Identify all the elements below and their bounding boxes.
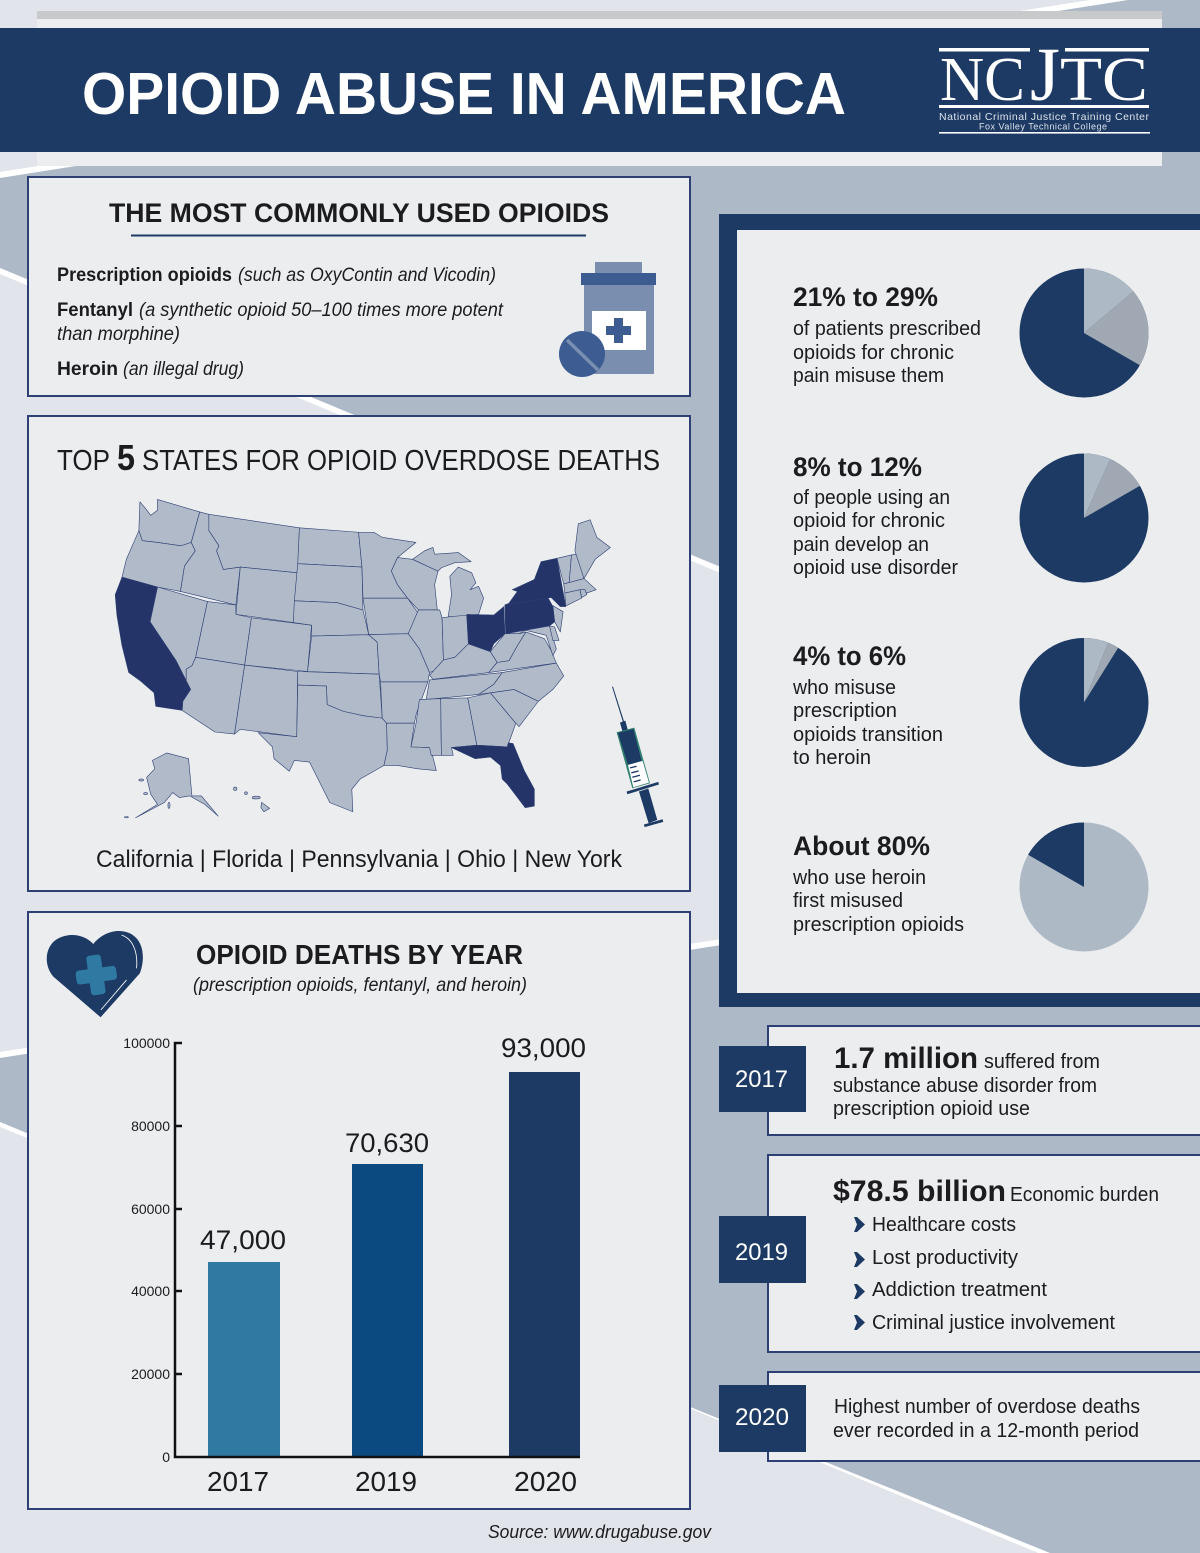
text: fentanyl [57,300,504,345]
heading: opioid deaths by year: OPIOID DEATHS BY YEAR [196,939,523,970]
state: Hawaii [234,787,270,812]
y axis labels [123,1035,170,1465]
text: 1.7 million: prescription opioid use [833,1098,1030,1120]
pie chart: 21% to 29% [1020,268,1149,398]
stat: about 80% [792,831,964,936]
text: highest overdose deaths: ever recorded in a 12-month period [833,1420,1139,1442]
stat: about 80%: About 80% [793,831,930,861]
heading: top 5 states: STATES FOR OPIOID OVERDOSE DEATHS [142,445,660,477]
list: cost items: Addiction treatment [872,1279,1047,1301]
stat: 4% to 6%: to heroin [793,747,871,769]
heading: top 5 states: 5 [117,437,135,478]
stat: about 80%: first misused [793,890,903,912]
text: 1.7 million: suffered from [984,1051,1100,1073]
pie chart: 4% to 6% [1020,638,1148,767]
value labels: 93,000 [501,1033,586,1063]
stat: 8% to 12% [793,452,958,579]
axes [175,1043,580,1457]
y axis labels: 20000 [131,1366,170,1382]
text: heroin: (an illegal drug) [123,359,244,380]
stat: 4% to 6%: opioids transition [793,724,943,746]
text: heroin: Heroin [57,359,118,380]
highlighted: New York [505,558,566,607]
stat: 21% to 29%: of patients prescribed [793,318,981,340]
highlighted: Ohio [467,607,505,652]
value labels: 70,630 [345,1128,429,1158]
pie chart: 8% to 12% [1020,454,1148,582]
stat: 8% to 12%: pain develop an [793,534,929,556]
stat: about 80%: prescription opioids [793,914,964,936]
highlighted: Pennsylvania [505,597,555,634]
y axis labels: 0 [162,1449,170,1465]
text: 1.7 million: 1.7 million [834,1042,978,1075]
logo: NCJTC: Fox Valley Technical College [979,122,1107,132]
y axis labels: 100000 [123,1035,170,1051]
bar: 2017 [208,1262,280,1457]
stat: 8% to 12%: opioid use disorder [793,557,958,579]
text: heroin [57,359,244,380]
logo: NCJTC: National Criminal Justice Training Center [939,111,1150,123]
year labels: 2020 [514,1466,577,1497]
year badge: 2017 [719,1046,806,1112]
pie chart: about 80% [1020,822,1148,952]
stat: 21% to 29%: opioids for chronic [793,342,954,364]
bar: 2019 [352,1164,423,1457]
list: cost items: Criminal justice involvement [872,1312,1115,1334]
year labels: 2019 [355,1466,417,1497]
y axis labels: 80000 [131,1118,170,1134]
year labels: 2017 [207,1466,269,1497]
timeline: 2019 [719,1155,1200,1352]
panel: statistics with pies [719,214,1200,1007]
highlighted: Florida [452,743,534,808]
text: prescription opioids: Prescription opioids [57,265,232,286]
year badge: 2017: 2017 [735,1066,788,1093]
stat: 21% to 29%: pain misuse them [793,365,944,387]
highlighted: California [115,577,191,710]
text: 78.5 billion: Economic burden [1010,1184,1159,1206]
source: Source: www.drugabuse.gov [488,1521,713,1542]
map: United States [115,499,610,818]
stat: 4% to 6%: who misuse [792,677,896,699]
text: 1.7 million: substance abuse disorder from [833,1075,1097,1097]
text: highest overdose deaths: Highest number of overdose deaths [834,1396,1140,1418]
value labels [200,1033,586,1255]
bar: 2020 [509,1072,580,1457]
text: highest overdose deaths [833,1396,1140,1442]
icon: pill bottle [559,262,656,377]
logo: NCJTC: NC [940,46,1025,114]
stat: 8% to 12%: opioid for chronic [793,510,945,532]
year badge: 2020: 2020 [735,1404,789,1431]
bar chart [123,1033,586,1497]
y axis labels: 40000 [131,1283,170,1299]
text: fentanyl: (a synthetic opioid 50–100 times more potent [139,300,504,321]
panel: top 5 states [28,416,690,891]
text: 78.5 billion: $78.5 billion [833,1175,1006,1208]
text: five states list: California | Florida | Pennsylvania | Ohio | New York [96,846,623,873]
stat: 8% to 12%: 8% to 12% [793,452,922,482]
stat: 4% to 6%: prescription [793,700,897,722]
year badge: 2019 [719,1216,806,1283]
icon: syringe [612,687,663,827]
logo: NCJTC [939,33,1150,134]
stat: 21% to 29% [793,282,981,387]
timeline: 2017 [719,1026,1200,1135]
heading: most commonly used opioids: THE MOST COMMONLY USED OPIOIDS [109,198,609,228]
y axis labels: 60000 [131,1201,170,1217]
text: 1.7 million [833,1042,1100,1120]
year badge: 2019: 2019 [735,1239,788,1266]
panel: most commonly used opioids [28,177,690,396]
heading: top 5 states [57,437,660,478]
list: cost items [854,1214,1115,1334]
list: cost items: Healthcare costs [872,1214,1016,1236]
stat: 8% to 12%: of people using an [793,487,950,509]
subheading: (prescription opioids, fentanyl, and heroin) [193,974,527,996]
heading: top 5 states: TOP [57,445,110,477]
year badge: 2020 [719,1385,806,1452]
stat: 4% to 6% [792,641,943,769]
text: fentanyl: than morphine) [57,324,180,345]
logo: NCJTC: TC [1060,46,1148,114]
text: prescription opioids: (such as OxyContin and Vicodin) [238,265,496,286]
stat: 21% to 29%: 21% to 29% [793,282,938,312]
logo: NCJTC: J [1030,33,1060,117]
header banner [0,28,1200,152]
state: Alaska [124,753,218,818]
value labels: 47,000 [200,1225,286,1255]
panel: opioid deaths by year [28,912,690,1509]
text: fentanyl: Fentanyl [57,300,133,321]
text: 78.5 billion [833,1175,1159,1208]
timeline: 2020 [719,1372,1200,1461]
icon: heart with cross [47,931,143,1017]
text: prescription opioids [57,265,496,286]
stat: about 80%: who use heroin [792,867,926,889]
stat: 4% to 6%: 4% to 6% [793,641,906,671]
list: cost items: Lost productivity [872,1247,1018,1269]
year labels [207,1466,577,1497]
title: OPIOID ABUSE IN AMERICA [82,61,846,127]
